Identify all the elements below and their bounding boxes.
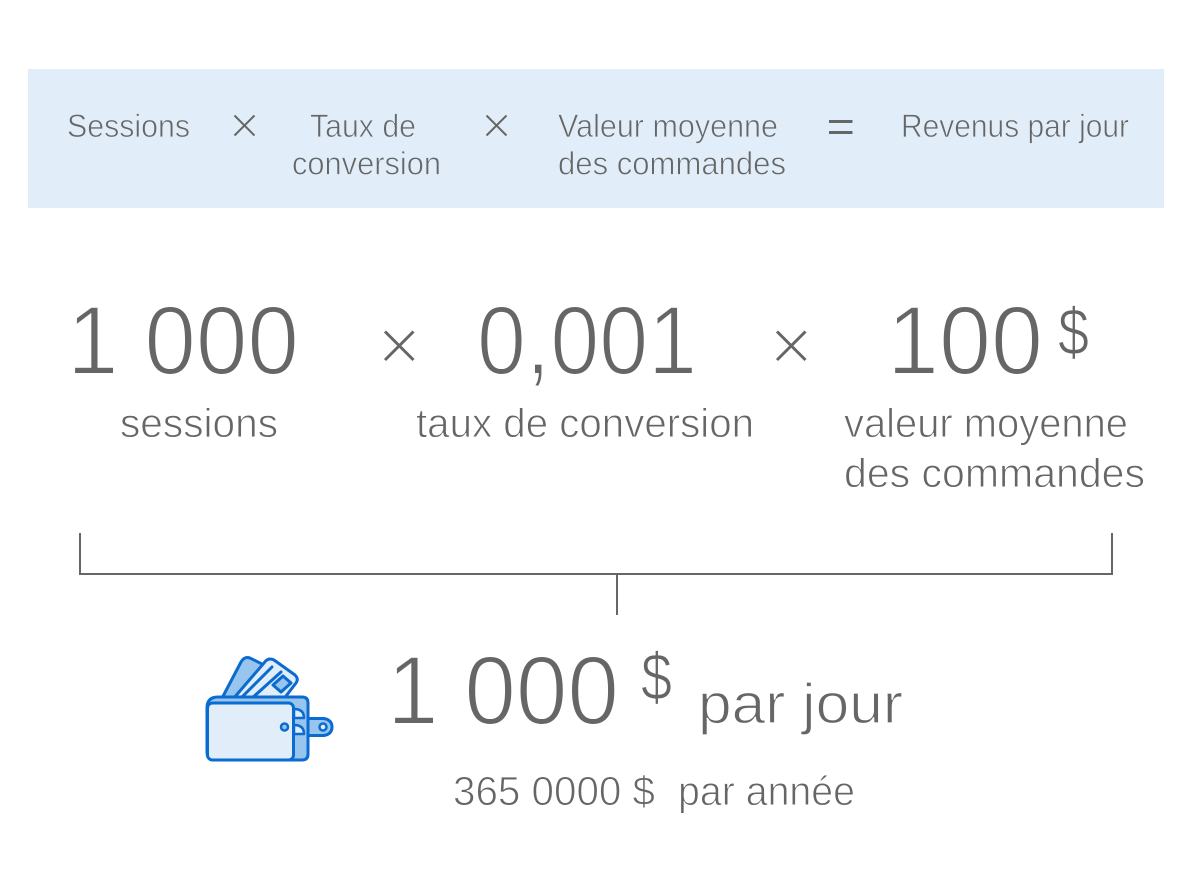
daily revenue result: 1 000 xyxy=(387,636,619,745)
conversion rate figure: taux de conversion xyxy=(416,400,754,446)
label: daily revenue: Revenus par jour xyxy=(901,108,1129,144)
label: sessions: Sessions xyxy=(67,108,190,144)
average order value figure: des commandes xyxy=(844,450,1145,496)
average order value figure xyxy=(844,286,1145,496)
average order value figure: valeur moyenne xyxy=(844,400,1128,446)
icon: multiply sign 1 xyxy=(234,116,254,136)
conversion rate figure: 0,001 xyxy=(477,286,697,395)
average order value figure: 100 xyxy=(887,286,1043,395)
daily revenue result xyxy=(387,636,903,745)
label: conversion rate: Taux de xyxy=(310,108,416,144)
yearly revenue result: 365 0000 $ xyxy=(453,768,655,814)
icon: equals sign xyxy=(829,122,852,132)
daily revenue result: par jour xyxy=(698,672,903,735)
daily revenue result: $ xyxy=(641,640,672,715)
icon: multiply sign 3 xyxy=(385,332,414,360)
icon: multiply sign 2 xyxy=(486,116,506,136)
average order value figure: $ xyxy=(1058,295,1089,370)
sessions figure xyxy=(67,286,299,446)
yearly revenue result xyxy=(453,768,855,814)
sessions figure: sessions xyxy=(120,400,278,446)
yearly revenue result: par année xyxy=(678,768,855,814)
label: conversion rate xyxy=(292,108,441,182)
label: conversion rate: conversion xyxy=(292,146,441,182)
icon: wallet xyxy=(207,658,332,760)
label: average order value: des commandes xyxy=(558,146,786,182)
sessions figure: 1 000 xyxy=(67,286,299,395)
panel: formula banner xyxy=(28,69,1164,208)
conversion rate figure xyxy=(416,286,754,446)
icon: multiply sign 4 xyxy=(777,332,806,360)
label: average order value: Valeur moyenne xyxy=(558,108,778,144)
bracket xyxy=(80,533,1112,615)
label: average order value xyxy=(558,108,786,182)
